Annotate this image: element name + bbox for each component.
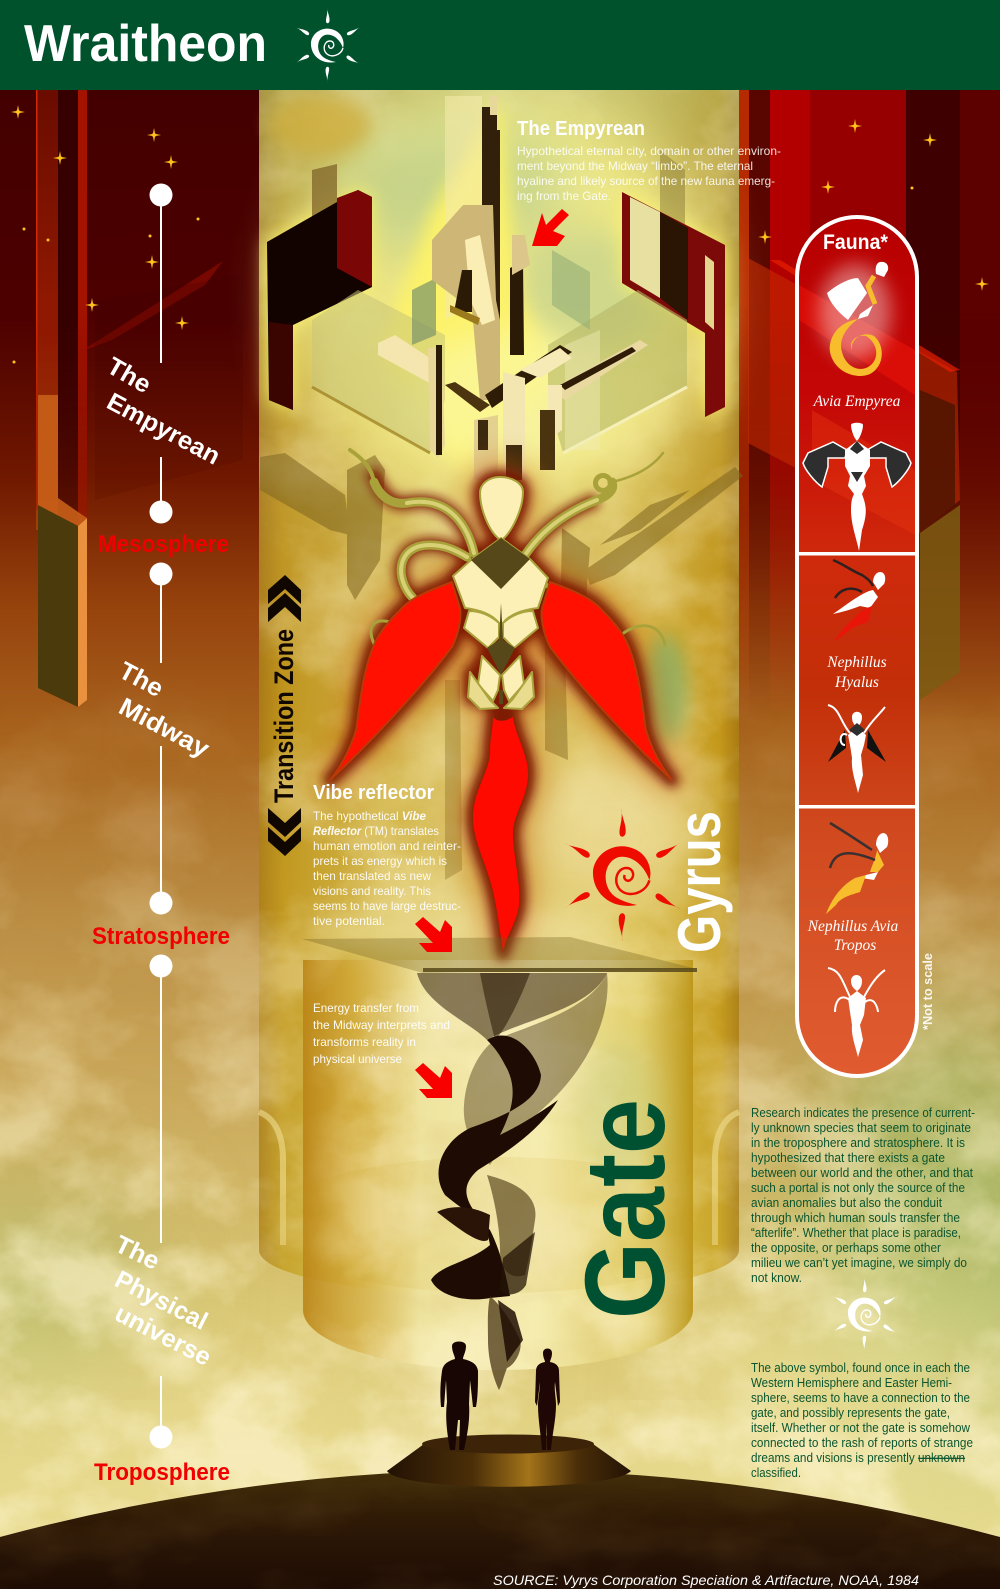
creature dark glow (330, 470, 672, 953)
shelf at gate top (302, 937, 697, 973)
text: Vibe reflector description: human emotion and reinter- (313, 839, 461, 853)
text: symbol paragraph: gate, and possibly represents the gate, (751, 1406, 950, 1420)
text: research paragraph: “afterlife”. Whether that place is paradise, (751, 1226, 961, 1240)
text: Vibe reflector description: seems to have large destruc- (313, 899, 461, 913)
text: research paragraph: Research indicates the presence of current- (751, 1106, 975, 1120)
label: Mesosphere: Mesosphere (98, 531, 229, 558)
text: research paragraph: hypothesized that there exists a gate (751, 1151, 945, 1165)
icon: Avia Empyrea side (819, 262, 891, 376)
layer label: The Empyrean: The (102, 352, 156, 399)
stars (11, 105, 989, 364)
tentacles (350, 450, 665, 646)
human figure: woman (535, 1348, 560, 1450)
text: Vibe reflector description: The hypothetical Vibe (313, 809, 426, 823)
text: energy transfer: physical universe (313, 1052, 402, 1066)
pale tower (445, 96, 482, 320)
species name: Avia Empyrea: Avia Empyrea (813, 393, 901, 410)
text: research paragraph: between our world and the other, and that (751, 1166, 973, 1180)
text: energy transfer: transforms reality in (313, 1035, 416, 1049)
glass plates (312, 250, 687, 453)
chevrons up (268, 575, 301, 622)
dark spire (432, 96, 530, 400)
text: Vibe reflector description: tive potential. (313, 914, 385, 928)
species name: Nephillus Avia Tropos: Nephillus Avia (807, 918, 899, 935)
Transition Zone label (268, 575, 301, 856)
layer label: The Midway: Midway (114, 693, 214, 763)
text: research paragraph: such a portal is not only the source of the (751, 1181, 965, 1195)
chevrons down (268, 808, 301, 856)
text: research paragraph (751, 1106, 975, 1285)
central column (259, 90, 739, 1300)
left hanging box (267, 164, 372, 410)
Transition Zone label: Transition Zone (269, 629, 299, 803)
icon: white sun symbol (831, 1276, 899, 1352)
fauna heading: Fauna* (823, 231, 889, 254)
body (453, 477, 548, 709)
text: The Empyrean description: Hypothetical eternal city, domain or other environ- (517, 144, 781, 158)
right hanging box (622, 150, 725, 417)
tail (473, 717, 528, 953)
layer label: The Midway (114, 657, 214, 763)
layer label: The Empyrean: Empyrean (102, 388, 225, 471)
text: Vibe reflector heading: Vibe reflector (313, 782, 434, 804)
text: The Empyrean description: hyaline and likely source of the new fauna emerg- (517, 174, 775, 188)
icon: header sun symbol (294, 7, 362, 83)
layer label: The Physical universe: The (110, 1230, 164, 1276)
text: Vibe reflector description: visions and reality. This (313, 884, 431, 898)
label: Gate: Gate (562, 1099, 688, 1319)
text: symbol paragraph: connected to the rash of reports of strange (751, 1436, 973, 1450)
panel: fauna (797, 217, 917, 1076)
label: Troposphere: Troposphere (94, 1459, 230, 1486)
note: not to scale: *Not to scale (920, 953, 935, 1030)
arrow: to city (532, 209, 569, 246)
text: research paragraph: milieu we can’t yet imagine, we simply do (751, 1256, 967, 1270)
text: symbol paragraph: sphere, seems to have a connection to the (751, 1391, 970, 1405)
text: The Empyrean description (517, 144, 781, 203)
creature: Vibe reflector (330, 450, 672, 953)
species name: Nephillus Hyalus: Nephillus (826, 654, 887, 671)
text: research paragraph: the opposite, or perhaps some other (751, 1241, 941, 1255)
text: Vibe reflector description: then translated as new (313, 869, 431, 883)
layer label: The Empyrean (102, 352, 225, 471)
title: Wraitheon (24, 15, 267, 73)
text: symbol paragraph: Western Hemisphere and Easter Hemi- (751, 1376, 952, 1390)
label: Gyrus: Gyrus (666, 811, 733, 953)
label: Stratosphere: Stratosphere (92, 923, 230, 950)
text: energy transfer (313, 1001, 450, 1066)
text: research paragraph: in the troposphere and stratosphere. It is (751, 1136, 965, 1150)
text: research paragraph: not know. (751, 1271, 802, 1285)
left tower block (38, 395, 87, 707)
icon: Nephillus Avia Tropos front (828, 968, 885, 1057)
human figure: man (440, 1342, 478, 1450)
text: energy transfer: the Midway interprets and (313, 1018, 450, 1032)
text: energy transfer: Energy transfer from (313, 1001, 419, 1015)
inner cylinder (280, 960, 718, 1370)
right stripes (739, 90, 1000, 720)
text: The Empyrean heading: The Empyrean (517, 118, 645, 140)
planet surface (0, 1470, 1000, 1589)
scale line and dots (150, 184, 172, 1448)
text: symbol paragraph: itself. Whether or not the gate is somehow (751, 1421, 971, 1435)
text: Vibe reflector description: Reflector (TM) translates (313, 824, 439, 838)
cross arms (378, 335, 648, 480)
icon: Nephillus Hyalus side (833, 560, 885, 642)
platform (387, 1434, 631, 1487)
layer label: The Midway: The (114, 657, 168, 703)
faint lower structure (260, 453, 743, 880)
species name: Nephillus Avia Tropos (807, 918, 899, 954)
text: The Empyrean description: ment beyond the Midway “limbo”. The eternal (517, 159, 753, 173)
source line: SOURCE: Vyrys Corporation Speciation & Artifacture, NOAA, 1984 (493, 1572, 919, 1588)
icon: Nephillus Hyalus front (828, 705, 886, 793)
text: Vibe reflector description (313, 809, 461, 928)
text: symbol paragraph: dreams and visions is presently unknown (751, 1451, 965, 1465)
text: symbol paragraph (751, 1361, 973, 1480)
arrow: to gate top (415, 917, 452, 952)
text: research paragraph: ly unknown species that seem to originate (751, 1121, 971, 1135)
header bar (0, 0, 1000, 90)
right tower block (748, 258, 960, 700)
icon: red Gyrus symbol (563, 808, 683, 942)
gate energy ribbon (417, 973, 608, 1390)
species name: Nephillus Hyalus (826, 654, 887, 691)
creature outer glow (330, 477, 672, 953)
text: The Empyrean description: ing from the Gate. (517, 189, 611, 203)
wings (330, 582, 672, 780)
text: Vibe reflector description: prets it as energy which is (313, 854, 447, 868)
text: symbol paragraph: classified. (751, 1466, 801, 1480)
the Empyrean city (260, 96, 743, 880)
left towers and stripes (36, 90, 243, 530)
layer label: The Physical universe: universe (110, 1299, 216, 1372)
text: symbol paragraph: The above symbol, found once in each the (751, 1361, 970, 1375)
icon: Avia Empyrea front (803, 423, 911, 551)
arrow: to ribbon (415, 1063, 452, 1098)
text: research paragraph: avian anomalies but also the conduit (751, 1196, 942, 1210)
species name: Nephillus Hyalus: Hyalus (834, 674, 879, 691)
layer label: The Physical universe: Physical (110, 1265, 212, 1336)
icon: Nephillus Avia Tropos side (826, 823, 888, 914)
layer label: The Physical universe (110, 1230, 216, 1372)
species name: Nephillus Avia Tropos: Tropos (834, 937, 876, 954)
text: research paragraph: through which human souls transfer the (751, 1211, 960, 1225)
